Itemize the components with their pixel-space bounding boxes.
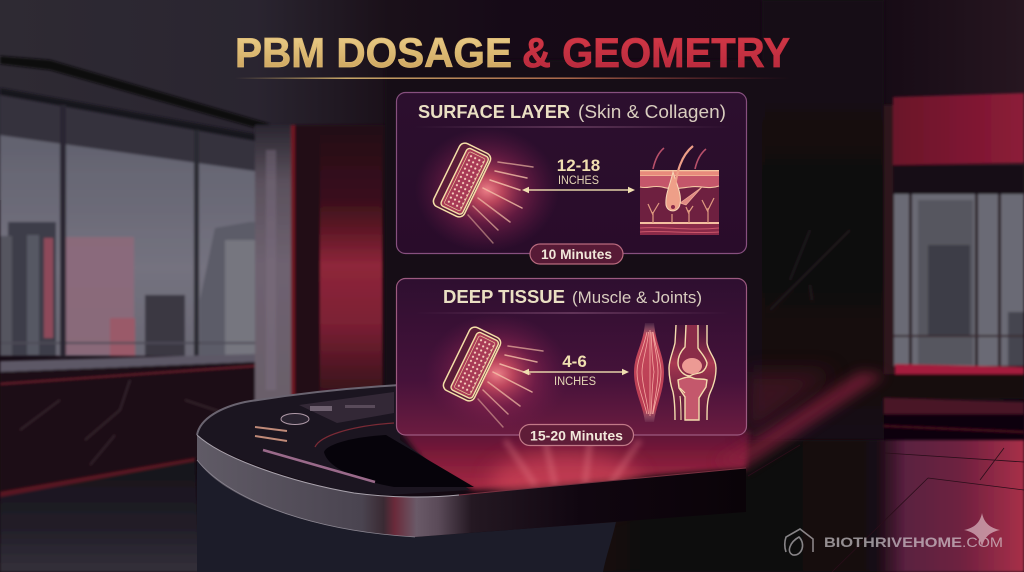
distance label: 4-6 inches: [554, 352, 596, 388]
panel: surface layer: [396, 92, 746, 264]
heading: deep tissue: DEEP TISSUE: [443, 286, 565, 307]
light beam from device to panels: [400, 372, 885, 512]
wall column: [255, 125, 291, 405]
icon: sparkle: [964, 513, 1000, 547]
watermark: biothrivehome.com: BIOTHRIVEHOME: [824, 534, 962, 550]
pill: 15-20 minutes: 15-20 Minutes: [530, 428, 623, 444]
ceiling: [0, 0, 1024, 200]
pill: 15-20 minutes: [520, 424, 634, 446]
floor: [600, 440, 1024, 572]
title: PBM DOSAGE: [235, 29, 512, 76]
icon: knee joint: [669, 325, 716, 420]
left floor: [0, 461, 200, 572]
heading: deep tissue: (Muscle & Joints): [572, 288, 702, 307]
console opening: [324, 435, 474, 487]
heading: surface layer: (Skin & Collagen): [578, 102, 726, 122]
distance label: 12-18 inches: 12-18: [557, 156, 600, 175]
left window and skyline: [0, 56, 385, 572]
icon: light panel device: [441, 325, 543, 427]
console rim: [197, 435, 746, 537]
heading: surface layer: SURFACE LAYER: [418, 101, 570, 122]
heading: deep tissue: [443, 286, 702, 307]
arrow: distance: [522, 187, 635, 193]
heading: surface layer: [418, 101, 726, 122]
title: [235, 29, 790, 76]
watermark: biothrivehome.com: [785, 513, 1003, 555]
panel: deep tissue: [396, 278, 746, 446]
device: treatment console: [197, 385, 746, 572]
icon: house and leaf: [785, 529, 813, 555]
title: & GEOMETRY: [522, 29, 790, 76]
arrow: distance: [522, 369, 629, 375]
icon: light panel device: [431, 141, 533, 243]
distance label: 4-6 inches: INCHES: [554, 376, 596, 388]
console controls: [255, 392, 394, 482]
light glow: [425, 314, 569, 434]
right side column and window: [385, 0, 1024, 460]
light glow: [415, 128, 559, 252]
icon: muscle: [634, 323, 664, 422]
watermark: biothrivehome.com: .COM: [962, 534, 1003, 550]
distance label: 12-18 inches: [557, 156, 600, 187]
ledge and marble: [0, 354, 255, 372]
console top surface: [197, 385, 470, 495]
distance label: 12-18 inches: INCHES: [558, 175, 599, 187]
distance label: 4-6 inches: 4-6: [562, 352, 587, 371]
icon: skin cross-section: [640, 146, 719, 235]
red wall panel: [291, 125, 385, 405]
pill: 10 minutes: 10 Minutes: [541, 246, 612, 262]
console body: [197, 460, 616, 572]
pill: 10 minutes: [530, 244, 623, 264]
